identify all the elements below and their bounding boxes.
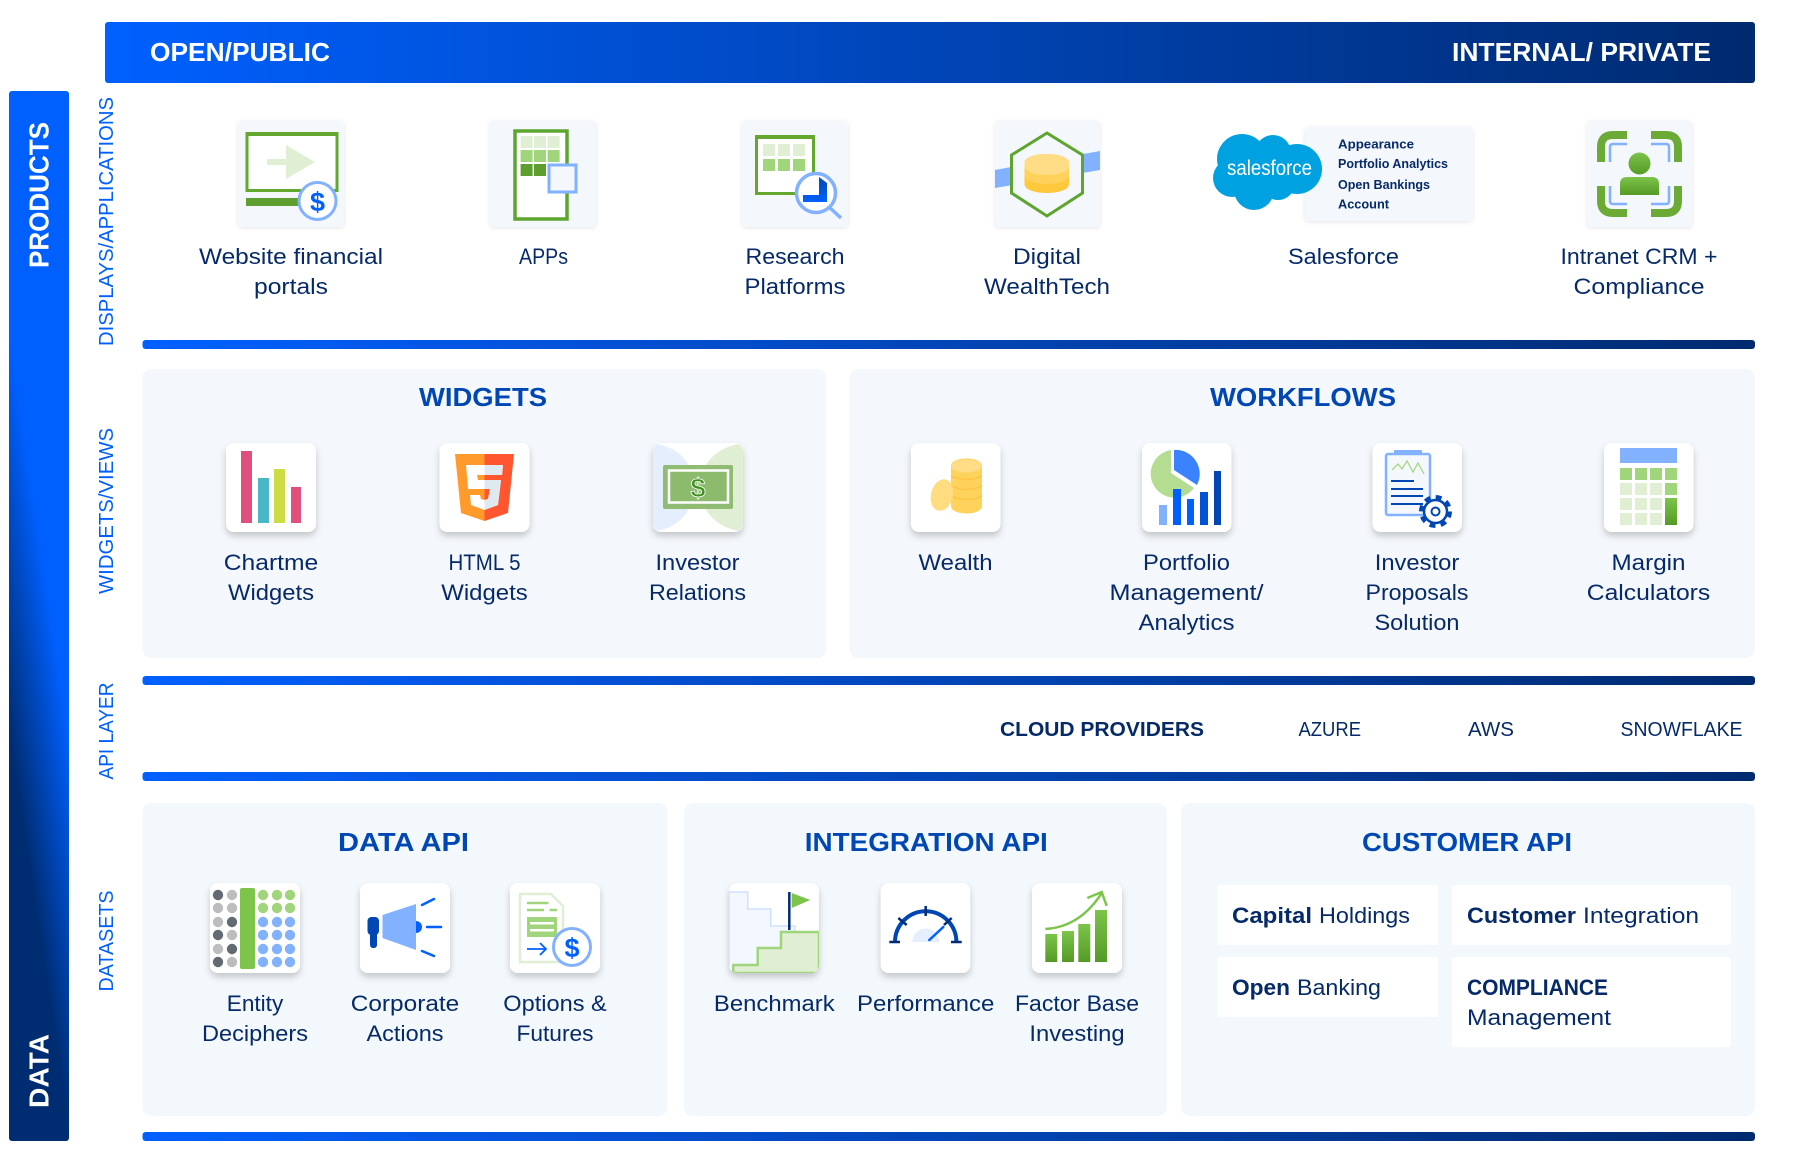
icon: salesforce cloud logo bbox=[1213, 134, 1322, 210]
feature list: Portfolio Analytics bbox=[1338, 157, 1448, 171]
label: performance: Performance bbox=[857, 991, 994, 1016]
label: intranet crm compliance bbox=[1560, 244, 1718, 299]
provider: snowflake: SNOWFLAKE bbox=[1620, 719, 1742, 741]
feature list: Appearance bbox=[1338, 138, 1414, 152]
label: chartme widgets bbox=[224, 550, 318, 605]
label: intranet crm compliance: Intranet CRM + bbox=[1560, 244, 1718, 269]
heading: data api: DATA API bbox=[338, 827, 469, 857]
label: research platforms: Platforms bbox=[744, 274, 846, 299]
card: open banking: Banking bbox=[1297, 975, 1381, 1000]
icon: factor base investing growth chart bbox=[1032, 883, 1122, 973]
label: options and futures bbox=[503, 991, 607, 1046]
icon: salesforce cloud logo: salesforce bbox=[1227, 157, 1312, 180]
vertical label: data: DATA bbox=[24, 1034, 54, 1108]
banner label: internal/private: INTERNAL/ PRIVATE bbox=[1452, 37, 1711, 67]
label: factor base investing: Investing bbox=[1029, 1021, 1125, 1046]
card: compliance management: COMPLIANCE bbox=[1467, 975, 1608, 1000]
top banner: open to internal bbox=[105, 22, 1755, 83]
label: entity deciphers: Entity bbox=[227, 991, 283, 1016]
icon: investor relations banknote bbox=[653, 443, 743, 532]
banner label: open/public: OPEN/PUBLIC bbox=[150, 37, 330, 67]
icon: entity decipher dots bbox=[210, 883, 300, 973]
label: options and futures: Futures bbox=[516, 1021, 594, 1046]
label: investor proposals solution bbox=[1366, 550, 1468, 635]
vertical label: products: PRODUCTS bbox=[24, 122, 54, 268]
icon: options and futures document bbox=[510, 883, 600, 973]
side label: datasets: DATASETS bbox=[96, 890, 118, 992]
cloud providers heading: CLOUD PROVIDERS bbox=[1000, 719, 1204, 741]
label: portfolio management analytics: Analytics bbox=[1138, 610, 1234, 635]
heading: widgets: WIDGETS bbox=[419, 382, 547, 412]
card: compliance management bbox=[1452, 957, 1731, 1047]
label: portfolio management analytics: Management/ bbox=[1110, 580, 1265, 605]
label: apps: APPs bbox=[519, 244, 568, 269]
label: entity deciphers bbox=[202, 991, 308, 1046]
card: capital holdings: Holdings bbox=[1319, 903, 1410, 928]
card: capital holdings bbox=[1217, 885, 1438, 945]
label: margin calculators bbox=[1587, 550, 1710, 605]
heading: workflows: WORKFLOWS bbox=[1210, 382, 1396, 412]
icon: wealth coins bbox=[911, 443, 1000, 532]
icon: website financial portals: $ bbox=[310, 187, 325, 217]
provider: aws: AWS bbox=[1468, 719, 1514, 741]
label: website financial portals: Website financial bbox=[199, 244, 383, 269]
feature list bbox=[1338, 138, 1448, 212]
label: website financial portals bbox=[199, 244, 383, 299]
feature list: Account bbox=[1338, 198, 1390, 212]
heading: integration api: INTEGRATION API bbox=[805, 827, 1048, 857]
divider bars bbox=[142, 340, 1755, 1141]
panel: customer api bbox=[1181, 803, 1755, 1116]
label: research platforms bbox=[744, 244, 846, 299]
icon: apps bbox=[490, 121, 596, 227]
label: investor relations bbox=[649, 550, 746, 605]
panel: widgets bbox=[142, 369, 826, 658]
icon: investor proposals clipboard bbox=[1372, 443, 1462, 532]
label: options and futures: Options & bbox=[503, 991, 607, 1016]
label: corporate actions bbox=[351, 991, 459, 1046]
card: customer integration bbox=[1452, 885, 1731, 945]
panel: workflows bbox=[850, 369, 1755, 658]
label: html 5 widgets: HTML 5 bbox=[448, 550, 520, 575]
icon: corporate actions megaphone bbox=[360, 883, 450, 973]
panel: data api bbox=[142, 803, 668, 1116]
card: open banking: Open bbox=[1232, 975, 1290, 1000]
icon: chartme bars bbox=[226, 443, 316, 532]
icon: website financial portals bbox=[238, 121, 344, 227]
label: digital wealthtech: Digital bbox=[1013, 244, 1081, 269]
label: digital wealthtech: WealthTech bbox=[984, 274, 1110, 299]
label: chartme widgets: Widgets bbox=[228, 580, 314, 605]
label: margin calculators: Calculators bbox=[1587, 580, 1710, 605]
card: open banking bbox=[1217, 957, 1438, 1017]
label: research platforms: Research bbox=[746, 244, 844, 269]
label: website financial portals: portals bbox=[254, 274, 328, 299]
label: portfolio management analytics: Portfolio bbox=[1143, 550, 1230, 575]
icon: investor relations banknote: $ bbox=[690, 473, 706, 503]
card: customer integration: Customer bbox=[1467, 903, 1576, 928]
side label: displays/applications: DISPLAYS/APPLICATIONS bbox=[96, 97, 118, 346]
label: entity deciphers: Deciphers bbox=[202, 1021, 308, 1046]
label: investor proposals solution: Solution bbox=[1374, 610, 1460, 635]
icon: performance gauge bbox=[881, 883, 970, 973]
icon: margin calculator bbox=[1604, 443, 1694, 532]
label: benchmark: Benchmark bbox=[714, 991, 836, 1016]
label: intranet crm compliance: Compliance bbox=[1574, 274, 1704, 299]
provider: azure: AZURE bbox=[1298, 719, 1361, 741]
api layer: cloud providers row bbox=[1000, 719, 1742, 741]
icon: intranet crm bbox=[1587, 121, 1692, 227]
label: corporate actions: Actions bbox=[366, 1021, 444, 1046]
label: html 5 widgets: Widgets bbox=[441, 580, 528, 605]
panel: integration api bbox=[684, 803, 1167, 1116]
label: investor proposals solution: Proposals bbox=[1366, 580, 1468, 605]
label: investor proposals solution: Investor bbox=[1375, 550, 1459, 575]
card: compliance management: Management bbox=[1467, 1005, 1611, 1030]
card: customer integration: Integration bbox=[1583, 903, 1699, 928]
card: salesforce features bbox=[1305, 127, 1473, 221]
card: capital holdings: Capital bbox=[1232, 903, 1312, 928]
label: portfolio management analytics bbox=[1110, 550, 1265, 635]
icon: research platforms bbox=[742, 121, 848, 227]
icon: html5 shield bbox=[440, 443, 530, 532]
feature list: Open Bankings bbox=[1338, 178, 1430, 192]
label: digital wealthtech bbox=[984, 244, 1110, 299]
label: wealth: Wealth bbox=[918, 550, 992, 575]
icon: options and futures document: $ bbox=[564, 933, 580, 963]
left vertical bar: products to data bbox=[9, 91, 69, 1141]
heading: customer api: CUSTOMER API bbox=[1362, 827, 1572, 857]
label: corporate actions: Corporate bbox=[351, 991, 459, 1016]
label: factor base investing bbox=[1015, 991, 1139, 1046]
label: factor base investing: Factor Base bbox=[1015, 991, 1139, 1016]
label: investor relations: Relations bbox=[649, 580, 746, 605]
label: html 5 widgets bbox=[441, 550, 528, 605]
label: salesforce: Salesforce bbox=[1288, 244, 1399, 269]
icon: benchmark stairs and flag bbox=[729, 883, 819, 973]
label: margin calculators: Margin bbox=[1612, 550, 1686, 575]
label: investor relations: Investor bbox=[656, 550, 740, 575]
side label: widgets/views: WIDGETS/VIEWS bbox=[96, 428, 118, 594]
icon: portfolio pie and bars bbox=[1142, 443, 1232, 532]
label: chartme widgets: Chartme bbox=[224, 550, 318, 575]
icon: digital wealthtech bbox=[995, 121, 1100, 227]
side label: api layer: API LAYER bbox=[96, 682, 118, 780]
